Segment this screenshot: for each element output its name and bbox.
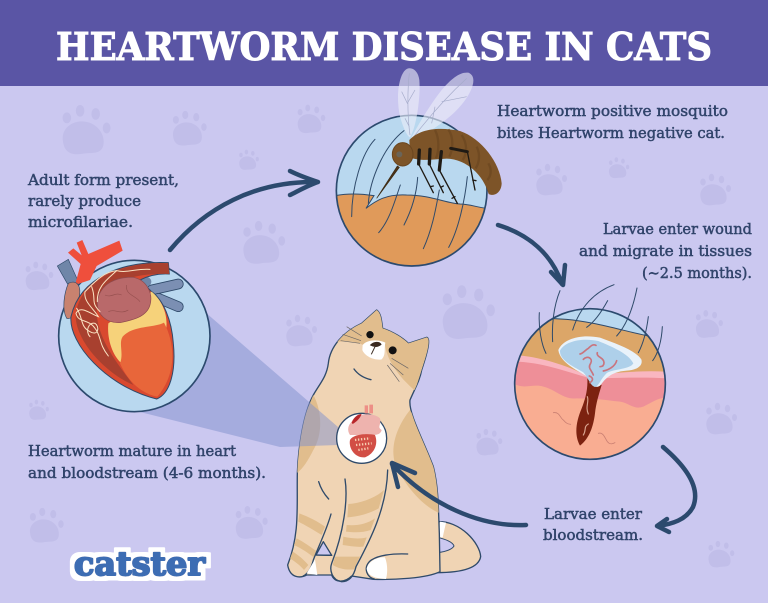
cat legs (303, 470, 388, 582)
background paw prints (26, 105, 737, 567)
arrow: mosquito to skin (498, 225, 565, 285)
text: heartworm mature: and bloodstream (4-6 months). (28, 464, 266, 482)
arrow: heart to mosquito (170, 171, 318, 250)
text: adult form: Adult form present, (27, 171, 179, 189)
text: mosquito step: bites Heartworm negative cat. (497, 124, 725, 142)
cat markings (290, 305, 440, 570)
hairs (539, 285, 662, 361)
text: larvae bloodstream: bloodstream. (543, 526, 643, 544)
heart circle (57, 240, 210, 412)
arrow: bloodstream to cat (392, 463, 526, 525)
mosquito body (377, 129, 502, 198)
text: heartworm mature: Heartworm mature in heart (28, 442, 236, 460)
text: larvae bloodstream: Larvae enter (544, 505, 643, 523)
text: larvae migrate: and migrate in tissues (579, 242, 752, 260)
mosquito circle (333, 68, 502, 273)
worms (76, 269, 150, 356)
wound track (576, 378, 602, 446)
mosquito legs (419, 148, 476, 203)
text: mosquito step: Heartworm positive mosquito (497, 102, 728, 120)
magnifier cone (140, 312, 338, 447)
cat illustration (288, 305, 481, 582)
body (288, 310, 440, 581)
skin (337, 194, 484, 266)
text: adult form: rarely produce (28, 192, 141, 210)
tissue layers (513, 303, 667, 463)
parasite mass (97, 277, 151, 323)
white heart inset (337, 405, 387, 463)
vessels (57, 240, 178, 319)
header band (0, 0, 768, 86)
wings (398, 68, 473, 140)
text: adult form: microfilariae. (28, 213, 133, 231)
cat eyes and nose (341, 327, 408, 382)
skin circle (513, 285, 667, 463)
title: HEARTWORM DISEASE IN CATS (56, 24, 712, 69)
larvae (580, 345, 617, 383)
text: larvae migrate: Larvae enter wound (603, 220, 752, 238)
cat paws (307, 559, 317, 575)
sky (336, 115, 487, 266)
cat muzzle (362, 340, 385, 360)
blister (558, 336, 642, 387)
lens (59, 260, 210, 412)
heart body (71, 263, 174, 399)
hairs (352, 131, 467, 249)
tail (437, 522, 481, 573)
tail gap (438, 537, 454, 553)
arrow: skin to bloodstream (657, 447, 695, 532)
logo: catster: catster (74, 544, 206, 583)
text: larvae migrate: (~2.5 months). (642, 264, 752, 282)
